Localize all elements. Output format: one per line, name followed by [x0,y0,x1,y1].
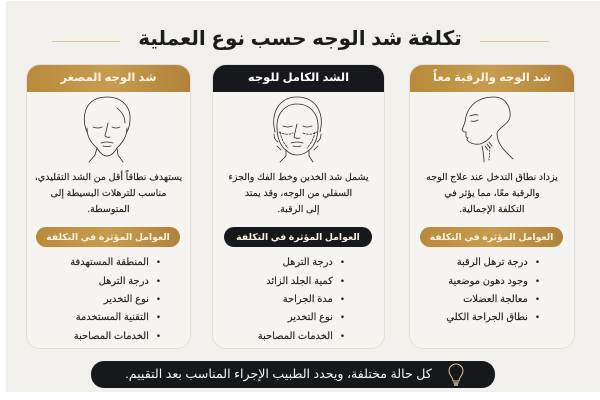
title: تكلفة شد الوجه حسب نوع العملية [138,28,462,50]
list: left factors: التقنية المستخدمة [76,312,149,323]
pill: cost factors left: العوامل المؤثرة في التكلفة [46,232,170,242]
list: middle factors: درجة الترهل [283,257,333,268]
list: middle factors: نوع التخدير [288,312,333,323]
panel: partial facelift [26,64,191,349]
panel: full facelift [212,64,385,349]
heading: full facelift: الشد الكامل للوجه [248,72,349,84]
text block: partial facelift description: مناسب للترهلات البسيطة إلى [51,188,166,199]
heading: face and neck lift [409,64,575,92]
list: right factors [446,257,539,323]
list: right factors: نطاق الجراحة الكلي [446,312,528,323]
pill: cost factors right: العوامل المؤثرة في التكلفة [430,232,553,242]
list: left factors [70,257,160,342]
callout bar [91,361,495,388]
text block: face and neck description: يزداد نطاق التدخل عند علاج الوجه [426,172,558,183]
heading: partial facelift [26,64,191,92]
list: middle factors [258,257,344,342]
pill: cost factors left [36,227,180,247]
list: left factors: المنطقة المستهدفة [70,257,149,268]
icon: light bulb [448,364,464,386]
heading: full facelift [212,64,385,92]
callout bar: كل حالة مختلفة، ويحدد الطبيب الإجراء المناسب بعد التقييم. [125,367,432,381]
icon: face and neck profile [462,96,514,162]
text block: face and neck description: والرقبة معًا، مما يؤثر في [444,188,540,199]
list: middle factors: الخدمات المصاحبة [258,331,333,342]
text block: full facelift description [228,172,369,215]
icon: partial facelift face [84,96,130,162]
pill: cost factors middle [224,227,372,247]
list: middle factors: كمية الجلد الزائد [266,276,333,287]
pill: cost factors right [420,227,563,247]
icon: full facelift face [273,96,322,162]
list: right factors: درجة ترهل الرقبة [457,257,528,268]
list: left factors: نوع التخدير [104,294,149,305]
list: right factors: معالجة العضلات [463,294,528,305]
pill: cost factors middle: العوامل المؤثرة في التكلفة [236,232,360,242]
heading: partial facelift: شد الوجه المصغر [60,72,157,84]
panel: face and neck lift [409,64,575,349]
text block: partial facelift description: يستهدف نطاقاً أقل من الشد التقليدي، [35,172,182,183]
text block: full facelift description: إلى الرقبة. [277,204,320,215]
text block: face and neck description [426,172,558,215]
text block: partial facelift description [35,170,182,215]
list: left factors: درجة الترهل [99,276,149,287]
text block: partial facelift description: المتوسطة. [87,204,130,215]
list: left factors: الخدمات المصاحبة [74,331,149,342]
list: right factors: وجود دهون موضعية [448,276,528,287]
list: middle factors: مدة الجراحة [283,294,333,305]
heading: face and neck lift: شد الوجه والرقبة معاً [433,72,551,84]
text block: face and neck description: التكلفة الإجمالية. [459,204,525,215]
text block: full facelift description: السفلي من الوجه، وقد يمتد [245,188,352,199]
text block: full facelift description: يشمل شد الخدين وخط الفك والجزء [228,172,369,183]
